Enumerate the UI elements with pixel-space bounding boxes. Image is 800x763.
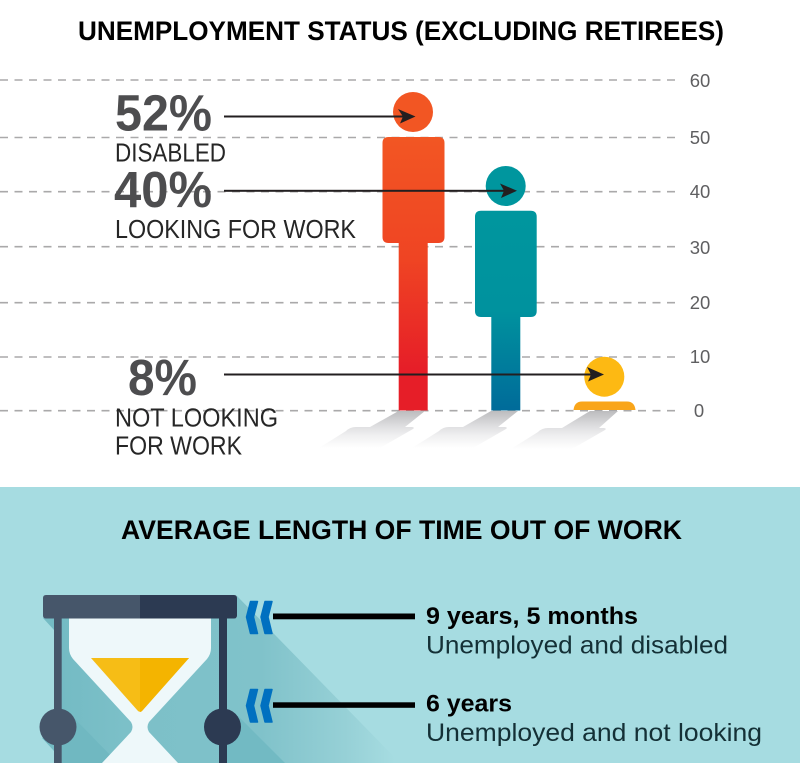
figure: looking for work (teal)	[475, 166, 537, 410]
figure: disabled (red)	[382, 92, 444, 410]
stat: 6 years: 6 years	[426, 691, 512, 718]
stat: 8% not looking for work: NOT LOOKING	[115, 404, 278, 432]
stat: 9 years, 5 months	[426, 603, 728, 659]
figure shadows	[319, 411, 618, 449]
axis labels	[690, 70, 710, 421]
stat: 52% disabled	[115, 84, 226, 168]
axis labels: 50	[690, 127, 710, 148]
stat: 6 years: Unemployed and not looking	[426, 719, 762, 747]
arrow: 8%	[224, 367, 604, 382]
stat: 40% looking for work: 40%	[114, 161, 212, 218]
stat: 40% looking for work	[114, 161, 356, 244]
stat: 9 years, 5 months: Unemployed and disabled	[426, 631, 728, 659]
hourglass long shadow	[42, 596, 400, 763]
arrow: 52%	[224, 109, 416, 124]
panel heading: AVERAGE LENGTH OF TIME OUT OF WORK	[121, 515, 682, 545]
connector: second row	[273, 702, 415, 708]
hourglass	[40, 595, 241, 763]
axis labels: 10	[690, 346, 710, 367]
gridlines	[0, 80, 676, 411]
stat: 52% disabled: DISABLED	[115, 140, 226, 168]
stat: 40% looking for work: LOOKING FOR WORK	[115, 216, 356, 244]
stat: 8% not looking for work: FOR WORK	[115, 432, 242, 460]
axis labels: 30	[690, 237, 710, 258]
stat: 9 years, 5 months: 9 years, 5 months	[426, 603, 638, 630]
stat: 8% not looking for work	[115, 349, 278, 460]
stat: 6 years	[426, 691, 762, 747]
axis labels: 60	[690, 70, 710, 91]
chevrons: second row	[246, 690, 272, 722]
stat: 52% disabled: 52%	[115, 84, 212, 142]
axis labels: 20	[690, 292, 710, 313]
figure: not looking for work (yellow)	[574, 357, 636, 410]
axis labels: 40	[690, 181, 710, 202]
connector: first row	[273, 614, 415, 619]
chevrons: first row	[246, 602, 272, 634]
arrow: 40%	[224, 184, 517, 198]
stat: 8% not looking for work: 8%	[128, 349, 197, 406]
axis labels: 0	[694, 400, 704, 421]
panel: average length of time	[0, 487, 800, 763]
chart heading: UNEMPLOYMENT STATUS (EXCLUDING RETIREES)	[78, 16, 724, 46]
